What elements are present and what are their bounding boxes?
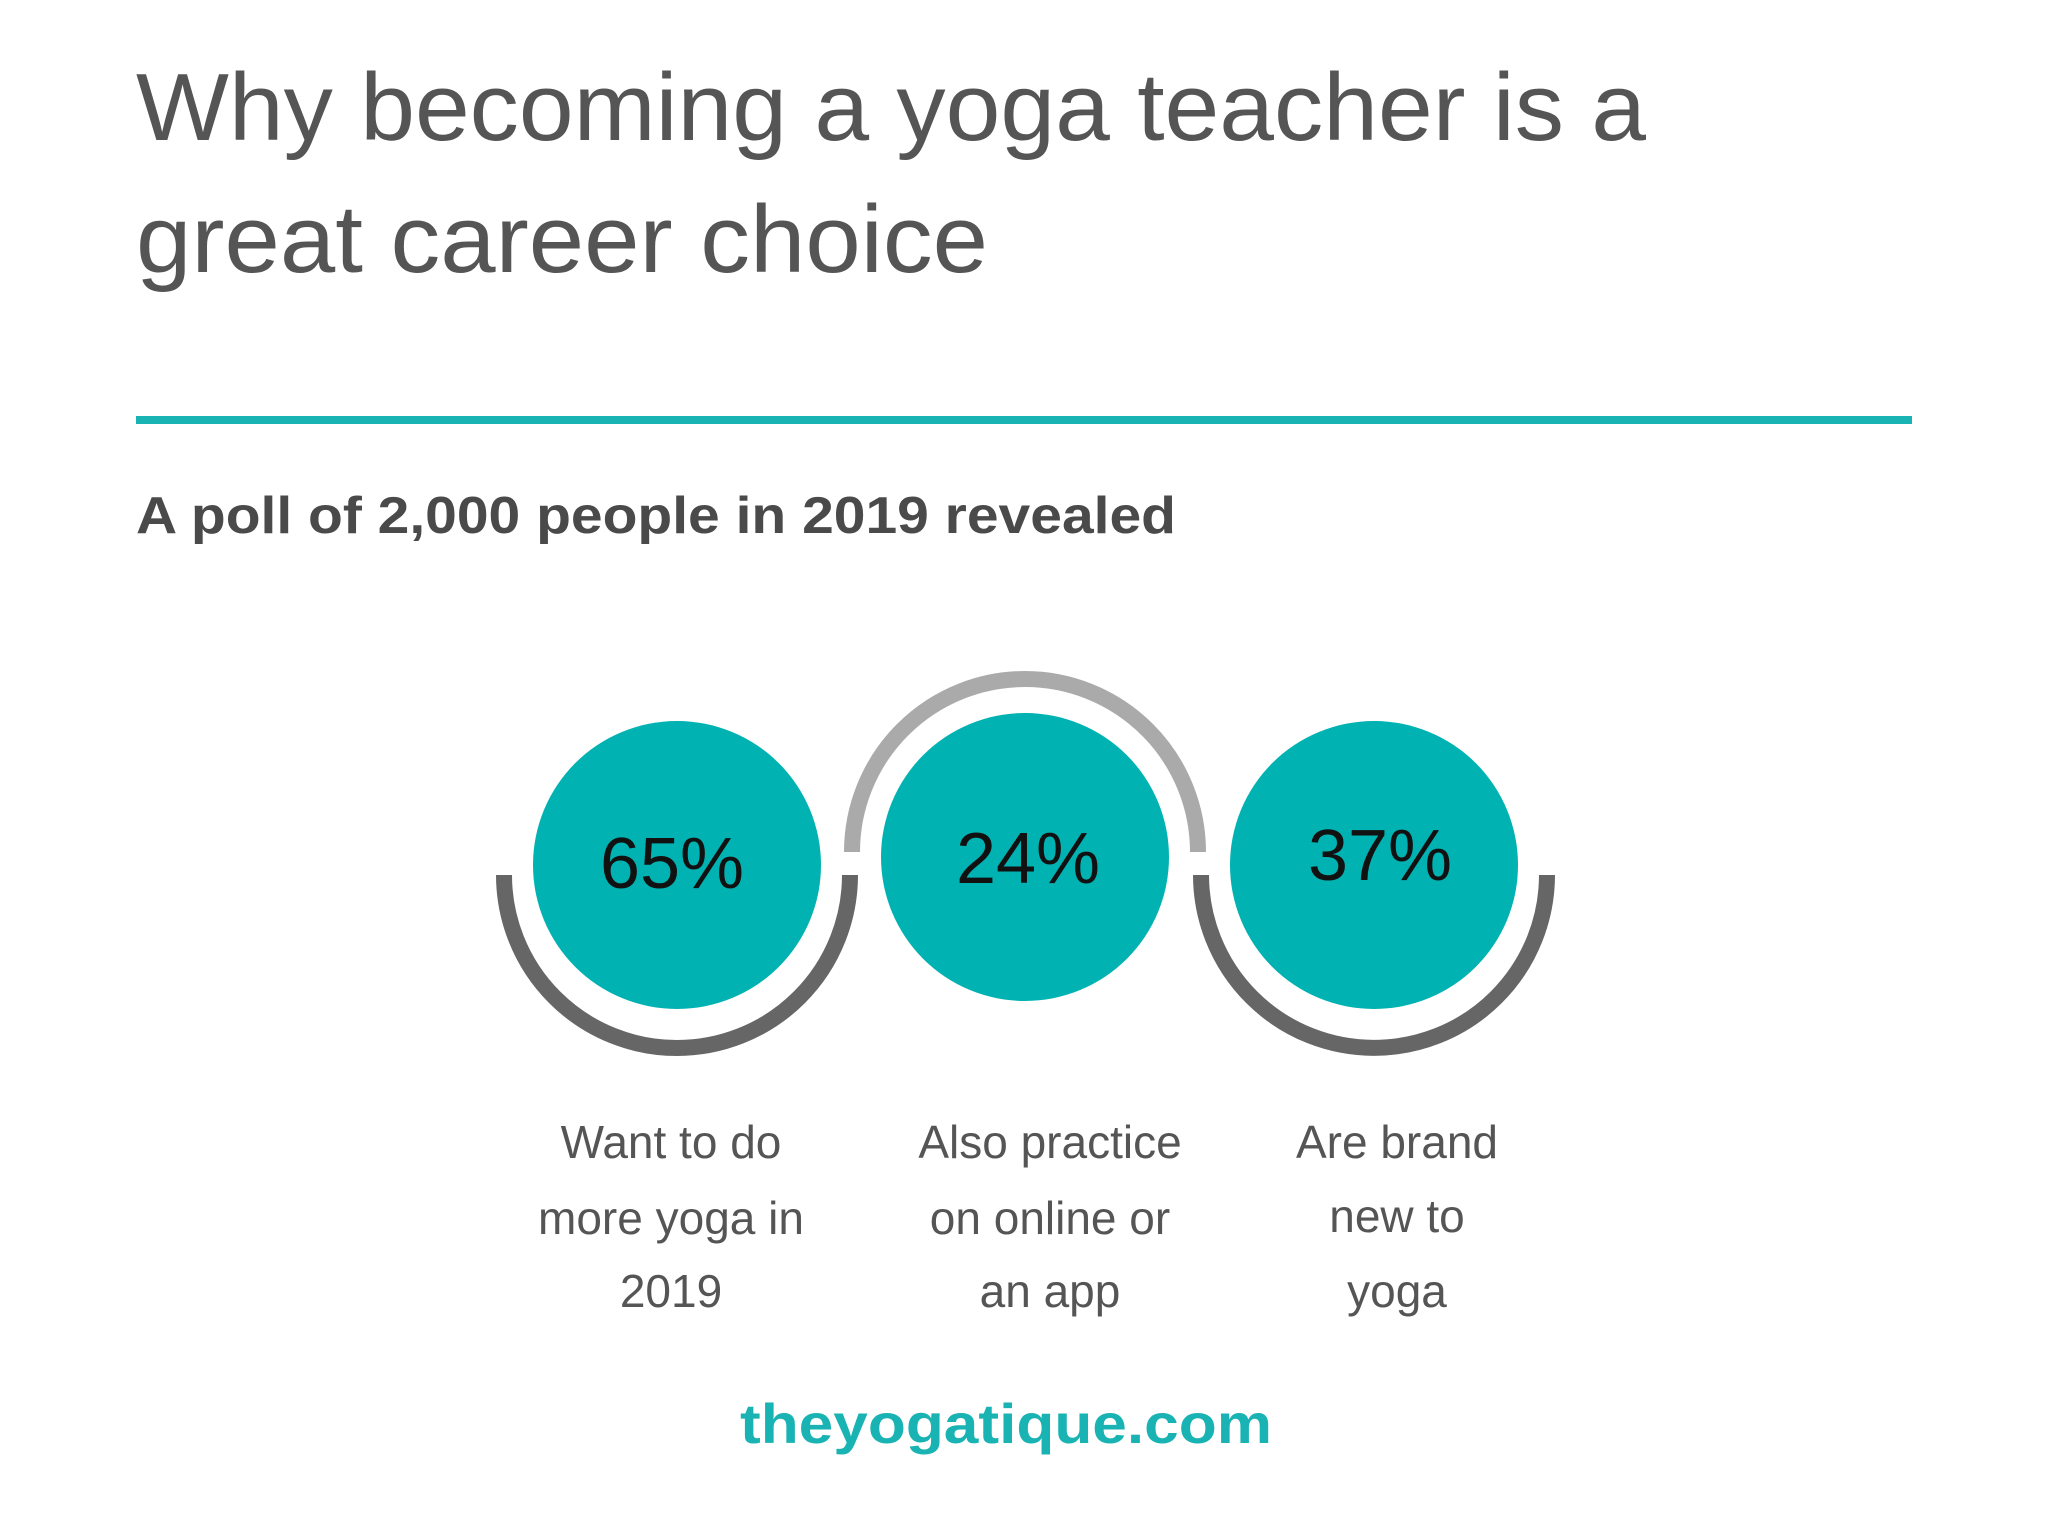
- stat: 37%: 37%: [1308, 816, 1452, 896]
- stat: 37%: [1201, 721, 1547, 1048]
- label: 65%: 2019: [620, 1265, 722, 1317]
- stat: 65%: [504, 721, 850, 1048]
- label: 24%: on online or: [930, 1192, 1170, 1244]
- stat: 24%: 24%: [956, 819, 1100, 899]
- label: 37%: Are brand: [1296, 1116, 1498, 1168]
- label: 65%: [538, 1116, 804, 1317]
- label: 24%: an app: [980, 1265, 1120, 1317]
- footer url: theyogatique.com: [740, 1392, 1272, 1455]
- label: 24%: Also practice: [918, 1116, 1182, 1168]
- label: 65%: Want to do: [561, 1116, 781, 1168]
- stat: 24%: [852, 679, 1198, 1001]
- label: 24%: [918, 1116, 1182, 1317]
- title: great career choice: [136, 186, 988, 293]
- stat: 65%: 65%: [600, 824, 744, 904]
- label: 37%: yoga: [1347, 1265, 1447, 1317]
- subtitle: A poll of 2,000 people in 2019 revealed: [136, 487, 1176, 545]
- label: 37%: [1296, 1116, 1498, 1317]
- title: [136, 54, 1647, 293]
- label: 65%: more yoga in: [538, 1192, 804, 1244]
- label: 37%: new to: [1329, 1190, 1465, 1242]
- title: Why becoming a yoga teacher is a: [136, 54, 1647, 161]
